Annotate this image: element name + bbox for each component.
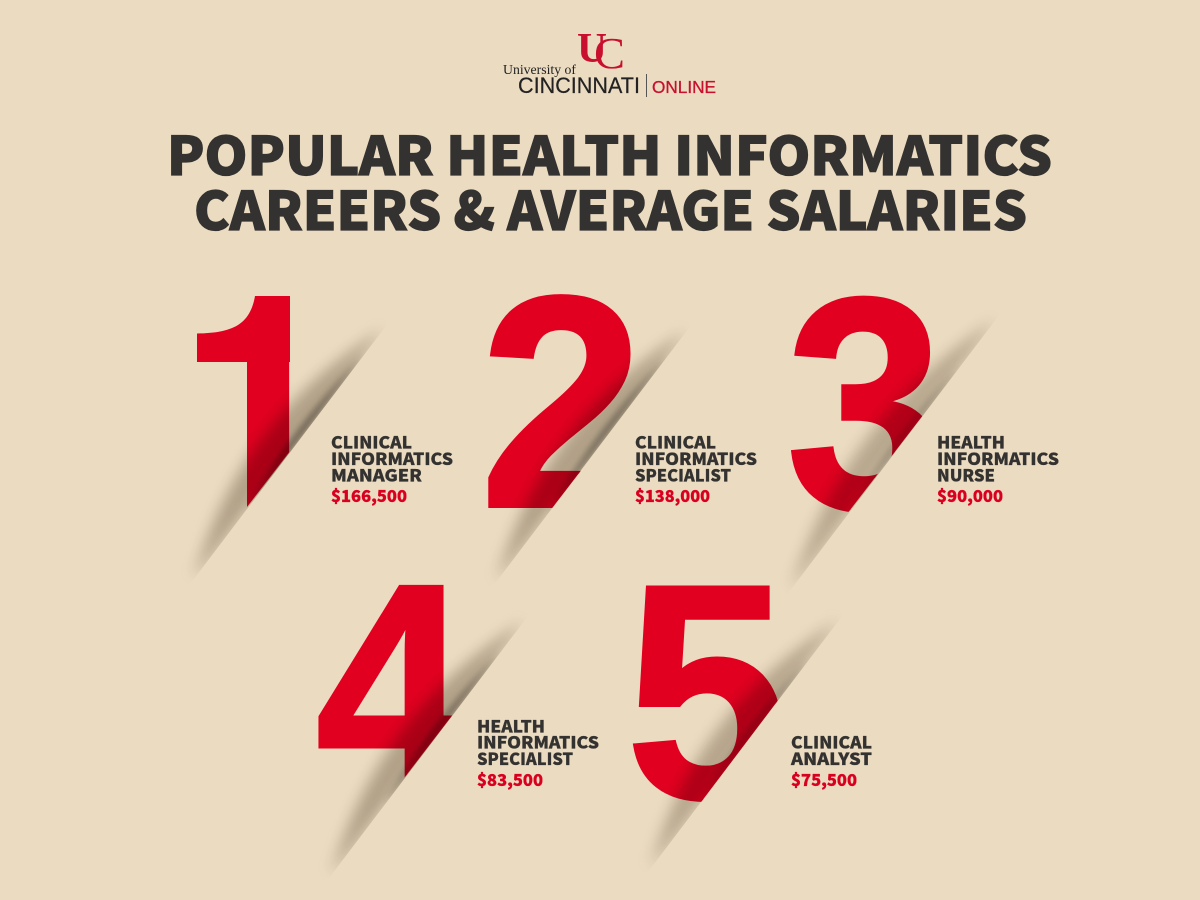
label 1 xyxy=(331,430,453,507)
logo text: Cincinnati: CINCINNATI xyxy=(518,73,640,98)
title: POPULAR HEALTH INFORMATICS xyxy=(167,115,1052,191)
label 4: SPECIALIST xyxy=(477,746,573,770)
career 2: clinical informatics specialist xyxy=(488,294,756,576)
title: CAREERS & AVERAGE SALARIES xyxy=(194,170,1027,246)
label 2: SPECIALIST xyxy=(635,463,731,487)
logo: University of Cincinnati Online xyxy=(503,26,716,98)
number 5: 5 xyxy=(626,521,788,863)
icon: UC monogram: C xyxy=(594,29,625,78)
logo text: Online: ONLINE xyxy=(652,77,716,97)
label 4: INFORMATICS xyxy=(477,730,599,754)
career 5: clinical analyst xyxy=(632,586,872,862)
fold shadow 1 xyxy=(192,330,380,574)
fold shadow 5 xyxy=(650,623,834,862)
label 3: $90,000 xyxy=(937,483,1003,507)
career 1: clinical informatics manager xyxy=(192,296,452,574)
label 5: ANALYST xyxy=(790,746,872,770)
logo text: University of: University of xyxy=(503,63,576,78)
label 1: $166,500 xyxy=(331,483,407,507)
title xyxy=(167,115,1052,246)
label 2: $138,000 xyxy=(635,483,710,507)
label 1: INFORMATICS xyxy=(331,446,453,470)
label 2 xyxy=(635,430,757,507)
number 3: 3 xyxy=(786,236,944,573)
label 4: HEALTH xyxy=(477,714,545,738)
label 3: NURSE xyxy=(937,463,995,487)
fold shadow 3 xyxy=(791,323,991,582)
icon: UC monogram xyxy=(577,26,625,78)
label 3: INFORMATICS xyxy=(937,446,1059,470)
number 4: 4 xyxy=(316,524,471,851)
label 1: CLINICAL xyxy=(331,430,412,454)
fold shadow 2 xyxy=(495,332,683,576)
label 2: INFORMATICS xyxy=(635,446,757,470)
label 5 xyxy=(790,730,872,791)
fold shadow 4 xyxy=(330,623,520,870)
label 2: CLINICAL xyxy=(635,430,716,454)
label 3 xyxy=(937,430,1059,507)
number 1: 1 xyxy=(175,231,346,575)
number 1 xyxy=(197,296,290,507)
career 4: health informatics specialist xyxy=(318,584,598,870)
label 5: $75,500 xyxy=(791,767,857,791)
label 4 xyxy=(477,714,599,791)
label 1: MANAGER xyxy=(331,463,422,487)
icon: UC monogram: U xyxy=(577,26,607,72)
number 2: 2 xyxy=(480,234,644,571)
label 3: HEALTH xyxy=(937,430,1005,454)
career 3: health informatics nurse xyxy=(790,296,1058,582)
label 5: CLINICAL xyxy=(791,730,872,754)
label 4: $83,500 xyxy=(477,767,543,791)
